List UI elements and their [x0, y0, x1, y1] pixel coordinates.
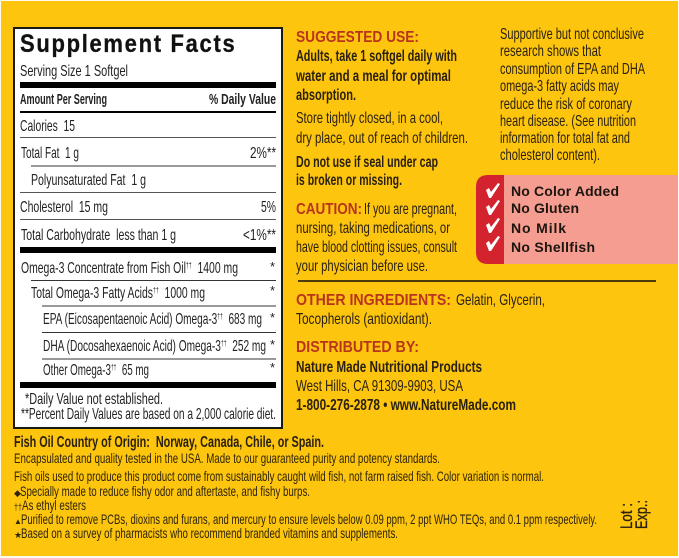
value: omega-3 concentrate: * [270, 259, 275, 274]
row: other omega-3: 65 mg [116, 362, 149, 379]
text block: health claim: research shows that [500, 43, 601, 60]
text block: footnotes: Based on a survey of pharmacists who recommend branded vitamins and supplements. [21, 525, 398, 541]
row: polyunsaturated fat: Polyunsaturated Fat 1 g [31, 172, 146, 189]
row: calories: Calories 15 [20, 118, 75, 135]
directions: Adults, take 1 softgel daily with [296, 48, 457, 65]
row: omega-3 concentrate: †† [186, 261, 192, 270]
text block: footnotes: As ethyl esters [22, 497, 86, 513]
list: free-from claims [511, 183, 619, 255]
text block: footnotes: ▲ [14, 517, 22, 526]
row: EPA: EPA (Eicosapentaenoic Acid) Omega-3 [43, 311, 320, 328]
list: free-from claims: No Color Added [511, 183, 619, 199]
panel: no added list [476, 175, 678, 264]
seal warning [296, 154, 438, 189]
row: cholesterol: Cholesterol 15 mg [20, 199, 108, 216]
panel: other ingredients: Gelatin, Glycerin, [456, 292, 545, 309]
value: total fat: 2%** [250, 145, 276, 162]
text block: footnotes: Encapsulated and quality tested in the USA. Made to our guaranteed purity and potency standards. [14, 450, 440, 466]
lot and expiry labels [617, 500, 651, 529]
panel: suggested use [295, 29, 468, 189]
panel: other ingredients: OTHER INGREDIENTS: [296, 292, 451, 309]
value: cholesterol: 5% [261, 199, 276, 216]
row: total omega-3: 1000 mg [159, 285, 205, 302]
row: total omega-3: Total Omega-3 Fatty Acids [31, 285, 219, 302]
storage: dry place, out of reach of children. [296, 130, 468, 147]
row: DHA: DHA (Docosahexaenoic Acid) Omega-3 [43, 338, 324, 355]
row: omega-3 concentrate: 1400 mg [192, 260, 238, 277]
footnote: daily value not established: *Daily Value not established. [25, 391, 163, 408]
panel: distributed by: DISTRIBUTED BY: [296, 339, 419, 356]
serving size: Serving Size 1 Softgel [20, 63, 128, 80]
directions: absorption. [296, 87, 356, 104]
value: total omega-3: * [270, 283, 275, 298]
value: EPA: * [270, 310, 275, 325]
text block: health claim: omega-3 fatty acids may [500, 78, 619, 95]
text block: health claim [500, 26, 645, 164]
row: DHA: 252 mg [227, 338, 266, 355]
row: EPA: †† [217, 312, 223, 321]
row: other omega-3: Other Omega-3 [43, 362, 154, 379]
panel: distributed by: 1-800-276-2878 • www.NatureMade.com [296, 397, 516, 414]
text block: footnotes: ★ [14, 530, 22, 540]
panel: caution: nursing, taking medications, or [296, 220, 450, 237]
lot and expiry labels: Exp.: [632, 500, 651, 529]
panel: caution [296, 201, 457, 275]
text block: footnotes: ◆ [14, 488, 21, 498]
column header: amount per serving: Amount Per Serving [20, 91, 107, 108]
icon: check marks [486, 183, 500, 251]
text block: health claim: cholesterol content). [500, 147, 600, 164]
panel: other ingredients: Tocopherols (antioxidant). [296, 311, 432, 328]
list: free-from claims: No Milk [511, 220, 566, 236]
list: free-from claims: No Shellfish [511, 239, 595, 255]
origin statement: Fish Oil Country of Origin: Norway, Canada, Chile, or Spain. [14, 434, 324, 451]
row: total carbohydrate: Total Carbohydrate less than 1 g [21, 227, 176, 244]
seal warning: is broken or missing. [296, 172, 402, 189]
heading: supplement facts: Supplement Facts [20, 30, 235, 57]
storage: Store tightly closed, in a cool, [296, 110, 443, 127]
row: total omega-3: †† [153, 286, 159, 295]
panel: distributed by [296, 339, 516, 414]
heading: suggested use: SUGGESTED USE: [296, 29, 419, 46]
list: free-from claims: No Gluten [511, 200, 579, 216]
directions: water and a meal for optimal [295, 68, 451, 85]
footnote: percent daily values: **Percent Daily Values are based on a 2,000 calorie diet. [21, 406, 276, 423]
panel: caution: have blood clotting issues, consult [296, 239, 457, 256]
panel: caution: your physician before use. [296, 258, 428, 275]
seal warning: Do not use if seal under cap [296, 154, 438, 171]
column header: daily value: % Daily Value [209, 91, 276, 108]
value: other omega-3: * [270, 360, 275, 375]
panel: caution: If you are pregnant, [364, 201, 457, 218]
panel: distributed by: West Hills, CA 91309-9903, USA [296, 378, 463, 395]
row: other omega-3: †† [111, 363, 116, 372]
row: DHA: †† [221, 339, 227, 348]
text block: footnotes: †† [14, 502, 22, 512]
text block: footnotes: Specially made to reduce fishy odor and aftertaste, and fishy burps. [20, 483, 310, 499]
panel: caution: CAUTION: [296, 201, 362, 218]
storage [296, 110, 468, 147]
lot and expiry labels: Lot : [617, 503, 636, 529]
value: DHA: * [270, 337, 275, 352]
row: EPA: 683 mg [223, 311, 262, 328]
text block: footnotes [14, 434, 597, 541]
panel: other ingredients [296, 292, 545, 328]
row: total fat: Total Fat 1 g [21, 145, 79, 162]
directions [295, 48, 457, 104]
panel: distributed by: Nature Made Nutritional Products [296, 359, 482, 376]
row: omega-3 concentrate: Omega-3 Concentrate from Fish Oil [21, 260, 274, 277]
value: total carbohydrate: <1%** [243, 227, 276, 244]
panel: supplement facts [14, 28, 282, 428]
